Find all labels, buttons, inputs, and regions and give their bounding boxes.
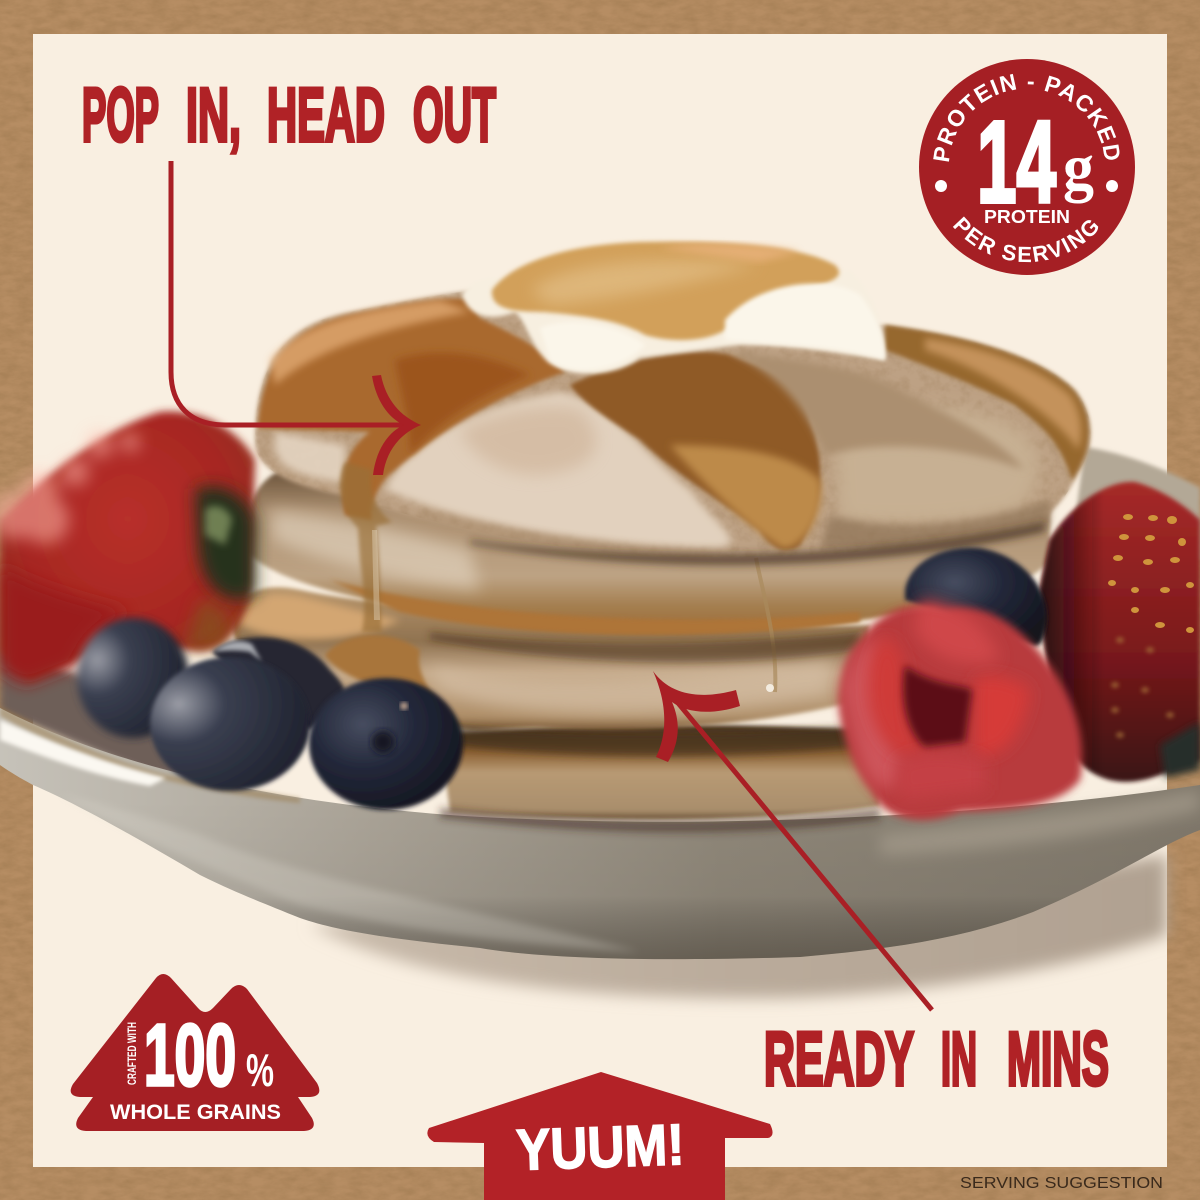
- butter and syrup pool: [462, 242, 885, 374]
- right blueberry: [905, 548, 1047, 646]
- blueberry front right: [309, 678, 463, 810]
- syrup centre: [570, 352, 820, 550]
- left blueberries: [77, 618, 463, 810]
- percent: %: [246, 1044, 274, 1096]
- plate body: [0, 706, 1200, 959]
- badge: 14g protein per serving: PROTEIN: [984, 207, 1070, 227]
- heading: pop in, head out: HEAD: [267, 73, 385, 158]
- heading: pop in, head out: [82, 73, 496, 158]
- heading: pop in, head out: IN,: [186, 73, 241, 158]
- badge curved text bottom: PER SERVING: [952, 216, 1098, 262]
- arrow banner: yuum: [427, 1072, 773, 1200]
- crafted with: CRAFTED WITH: [125, 1022, 139, 1085]
- blueberry back middle: [212, 637, 345, 730]
- photo: pancake stack on plate with berries: [0, 242, 1200, 959]
- dark gaps between pancakes: [430, 522, 1045, 833]
- right strawberry: [1040, 482, 1200, 782]
- plate back rim: [1075, 447, 1200, 560]
- badge number: 14: [977, 97, 1056, 227]
- plate inner shadow left: [0, 650, 240, 780]
- heading: pop in, head out: OUT: [413, 73, 496, 158]
- left strawberry: [0, 412, 255, 685]
- blueberry back left: [77, 618, 189, 738]
- top pancake: [255, 290, 1091, 558]
- syrup right: [885, 325, 1089, 480]
- syrup drips: [340, 462, 775, 692]
- heading: ready in mins: MINS: [1007, 1017, 1109, 1102]
- serving suggestion note: SERVING SUGGESTION: [960, 1175, 1163, 1192]
- badge: 14g protein per serving: [919, 59, 1135, 275]
- raspberry: [839, 600, 1082, 820]
- badge: 14g protein per serving: g: [1063, 131, 1094, 204]
- third pancake: [232, 587, 870, 730]
- 100: 100: [144, 1007, 236, 1104]
- second pancake: [248, 470, 1050, 634]
- badge: 100% whole grains: [71, 974, 319, 1131]
- pancake highlights: [385, 392, 731, 548]
- heading: pop in, head out: POP: [82, 73, 159, 158]
- heading: ready in mins: READY: [764, 1017, 914, 1102]
- arrow: ready in mins to pancake: [653, 671, 932, 1010]
- heading: ready in mins: IN: [941, 1017, 977, 1102]
- pancake surface grain: [255, 290, 1091, 558]
- plate drop shadow: [310, 855, 1167, 998]
- pancake right mottled: [730, 352, 1025, 470]
- whole grains: WHOLE GRAINS: [110, 1101, 281, 1124]
- syrup left: [258, 299, 565, 520]
- bottom pancake: [440, 725, 880, 820]
- arrow: pop in to top pancake: [171, 161, 421, 475]
- blueberry front left: [150, 657, 310, 791]
- yuum text: YUUM!: [515, 1112, 685, 1183]
- badge curved text top: PROTEIN - PACKED: [933, 74, 1120, 162]
